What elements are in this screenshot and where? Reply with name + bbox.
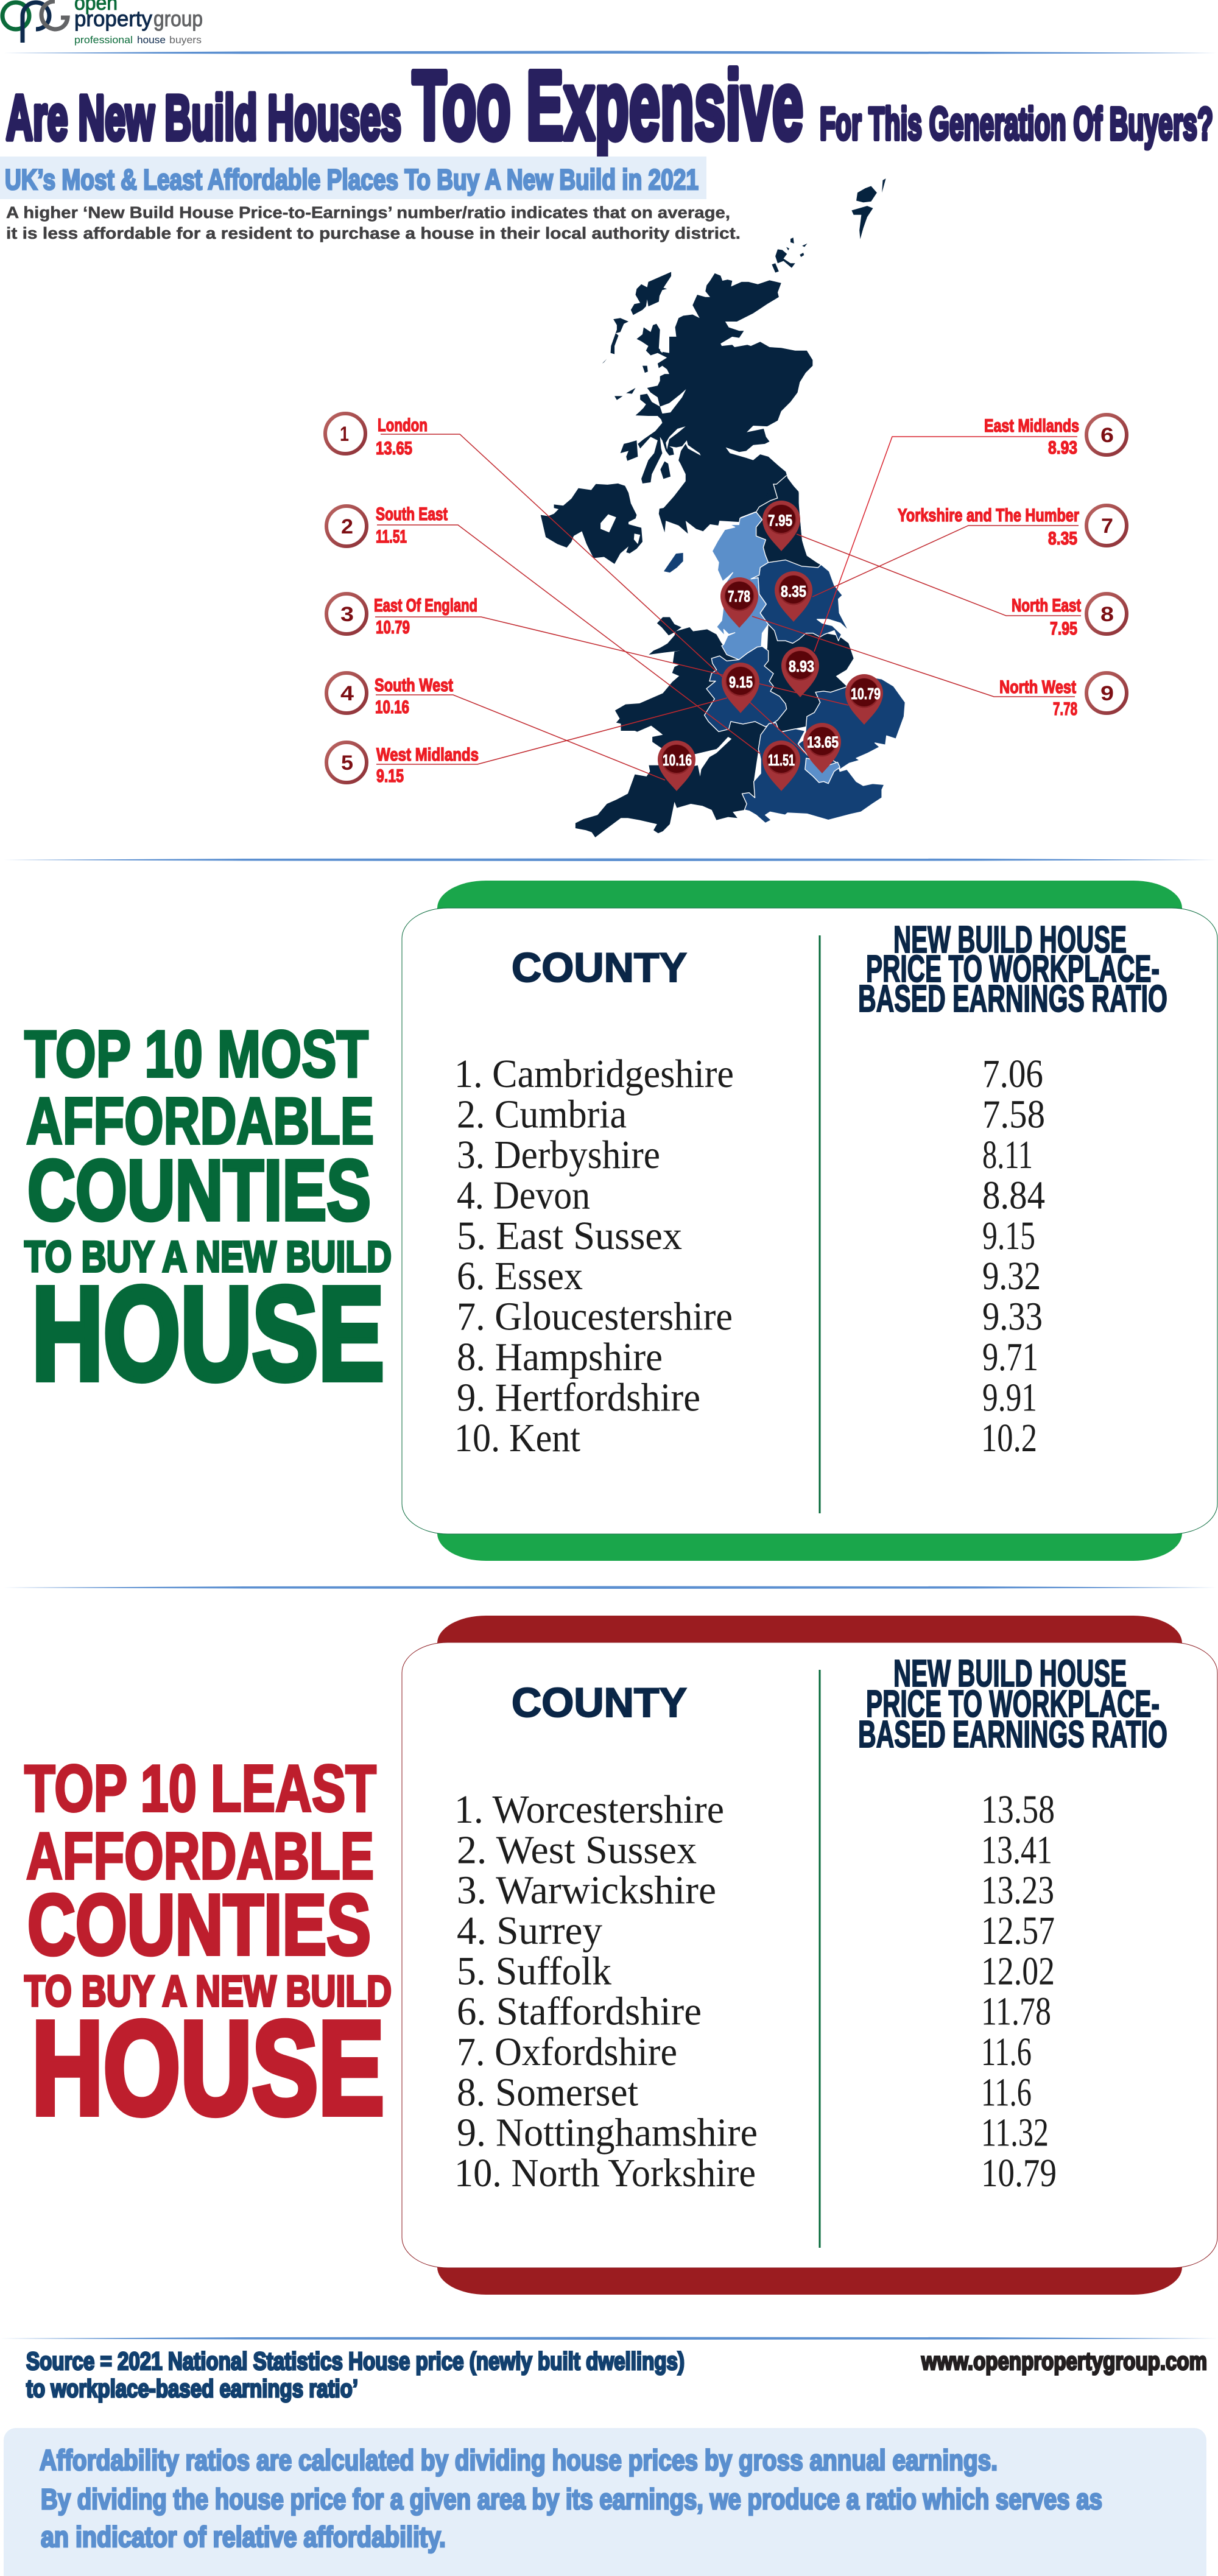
ratio values xyxy=(981,1787,1057,2195)
county list: 6. Essex xyxy=(457,1254,583,1298)
heading: top 10 least affordable counties: TO BUY A NEW BUILD xyxy=(24,1968,392,2016)
map pins xyxy=(658,501,883,791)
title: Are New Build Houses xyxy=(6,83,401,153)
subtitle band xyxy=(0,157,706,199)
county list xyxy=(454,1787,758,2195)
callout 2: South East: 11.51 xyxy=(376,527,407,547)
county list: 5. East Sussex xyxy=(457,1214,682,1258)
callout 6: East Midlands: 6 xyxy=(1100,424,1114,447)
explainer box xyxy=(4,2428,1206,2576)
callout 1: London: 13.65 xyxy=(376,438,412,459)
callout 3: East Of England: 3 xyxy=(340,603,354,626)
callout 4: South West: 4 xyxy=(340,682,354,705)
callout 4: South West: 10.16 xyxy=(375,697,409,717)
title: Too Expensive xyxy=(412,51,803,160)
map: Wales and South West xyxy=(576,617,784,837)
pin: South East: 11.51 xyxy=(768,751,795,769)
pin: South West xyxy=(658,741,695,791)
ratio values: 7.06 xyxy=(982,1052,1043,1096)
callout 6: East Midlands: 8.93 xyxy=(1048,438,1077,458)
callout 6: East Midlands xyxy=(984,415,1127,458)
county list: 9. Hertfordshire xyxy=(457,1376,700,1420)
callout 7: Yorkshire and The Humber: 8.35 xyxy=(1048,529,1077,549)
column heading: county: COUNTY xyxy=(512,945,687,991)
column heading: county: COUNTY xyxy=(512,1680,687,1726)
county list xyxy=(454,1052,734,1460)
ratio values: 11.78 xyxy=(981,1990,1051,2034)
callout 3: East Of England: 10.79 xyxy=(376,618,410,638)
map: North East and East Midlands xyxy=(751,476,854,731)
callout 5: West Midlands: 5 xyxy=(341,751,353,775)
heading: top 10 least affordable counties: TOP 10 LEAST xyxy=(24,1751,376,1826)
pin: East of England xyxy=(845,674,883,725)
callout 4: South West xyxy=(326,673,453,717)
callout 9: North West: North West xyxy=(999,677,1076,697)
callout 9: North West: 7.78 xyxy=(1053,699,1077,719)
ratio values: 9.15 xyxy=(982,1214,1035,1258)
ratio values: 8.84 xyxy=(982,1173,1045,1217)
callout 8: North East: 8 xyxy=(1100,603,1114,626)
callout 1: London: London xyxy=(378,415,428,435)
callout 6: East Midlands: East Midlands xyxy=(984,416,1079,436)
pin: West Midlands: 9.15 xyxy=(729,673,753,691)
pin: North West: 7.78 xyxy=(728,587,750,605)
subtitle band: UK’s Most & Least Affordable Places To Buy A New Build in 2021 xyxy=(5,163,699,195)
logo: open property group: professional xyxy=(74,34,133,46)
callout 3: East Of England: East Of England xyxy=(374,596,477,616)
title xyxy=(6,51,1213,160)
ratio values: 11.6 xyxy=(981,2030,1032,2074)
intro text: A higher ‘New Build House Price-to-Earnings’ number/ratio indicates that on average, xyxy=(6,203,730,222)
source note xyxy=(26,2347,685,2402)
county list: 6. Staffordshire xyxy=(457,1990,702,2034)
ratio values: 9.32 xyxy=(982,1254,1041,1298)
map: London region xyxy=(805,758,840,784)
callout 4: South West: South West xyxy=(375,675,453,695)
pin: South West: 10.16 xyxy=(663,751,692,769)
explainer box: Affordability ratios are calculated by dividing house prices by gross annual earnings. xyxy=(40,2444,998,2476)
callout 3: East Of England xyxy=(326,594,477,638)
county list: 9. Nottinghamshire xyxy=(457,2111,758,2155)
heading: top 10 most affordable counties: TOP 10 MOST xyxy=(24,1017,368,1091)
callout 1: London xyxy=(325,413,428,459)
pin: East of England: 10.79 xyxy=(851,684,881,703)
logo: open property group: house xyxy=(137,34,166,46)
panel: most affordable table xyxy=(402,881,1217,1561)
heading: top 10 most affordable counties: COUNTIES xyxy=(27,1142,371,1238)
heading: top 10 least affordable counties xyxy=(24,1751,392,2142)
ratio values: 13.58 xyxy=(981,1787,1055,1832)
county list: 7. Gloucestershire xyxy=(457,1295,733,1339)
ratio values: 12.02 xyxy=(981,1949,1055,1993)
county list: 7. Oxfordshire xyxy=(457,2030,677,2074)
map: Shetland xyxy=(851,178,886,239)
pin: West Midlands xyxy=(722,663,759,713)
callout 5: West Midlands: West Midlands xyxy=(376,745,479,765)
map: East of England region xyxy=(798,676,905,769)
ratio values: 7.58 xyxy=(982,1092,1045,1136)
ratio values: 13.23 xyxy=(981,1868,1054,1913)
county list: 10. Kent xyxy=(454,1416,580,1460)
map: South East region xyxy=(742,723,884,823)
explainer box: an indicator of relative affordability. xyxy=(41,2521,446,2553)
logo: open property group: buyers xyxy=(169,34,202,46)
intro text xyxy=(6,203,741,242)
callout 9: North West: 9 xyxy=(1100,682,1114,705)
source note: to workplace-based earnings ratio’ xyxy=(26,2374,358,2402)
ratio values: 9.33 xyxy=(982,1295,1043,1339)
callout 2: South East xyxy=(326,504,448,547)
callout 8: North East xyxy=(1012,594,1127,639)
map of the UK xyxy=(541,178,905,837)
county list: 10. North Yorkshire xyxy=(454,2151,756,2195)
heading: top 10 most affordable counties xyxy=(24,1017,392,1408)
intro text: it is less affordable for a resident to purchase a house in their local authority district. xyxy=(6,224,741,242)
pin: Yorkshire and The Humber xyxy=(775,571,812,622)
column heading: ratio xyxy=(858,919,1167,1020)
ratio values: 9.91 xyxy=(982,1376,1037,1420)
ratio values: 11.32 xyxy=(981,2111,1049,2155)
leader lines xyxy=(375,434,1081,780)
column heading: ratio xyxy=(858,1653,1167,1756)
callout 8: North East: North East xyxy=(1012,596,1081,616)
ratio values: 8.11 xyxy=(982,1133,1033,1177)
county list: 4. Devon xyxy=(457,1173,590,1217)
county list: 5. Suffolk xyxy=(457,1949,611,1993)
map: Scotland and islands xyxy=(602,238,820,568)
callout 5: West Midlands: 9.15 xyxy=(376,766,404,786)
map: Northern Ireland xyxy=(541,484,642,564)
county list: 8. Somerset xyxy=(457,2070,638,2114)
county list: 2. Cumbria xyxy=(457,1092,627,1136)
heading: top 10 most affordable counties: HOUSE xyxy=(32,1260,384,1408)
map: West Midlands region xyxy=(705,646,787,731)
ratio values: 13.41 xyxy=(981,1828,1052,1872)
callout 2: South East: 2 xyxy=(341,515,353,538)
county list: 8. Hampshire xyxy=(457,1335,663,1379)
callout 5: West Midlands xyxy=(326,742,479,786)
county list: 1. Cambridgeshire xyxy=(454,1052,734,1096)
ratio values: 10.79 xyxy=(981,2151,1057,2195)
ratio values: 11.6 xyxy=(981,2070,1032,2114)
county list: 1. Worcestershire xyxy=(454,1787,724,1832)
map: Isle of Man xyxy=(664,553,683,572)
county list: 2. West Sussex xyxy=(457,1828,697,1872)
ratio values: 12.57 xyxy=(981,1909,1055,1953)
pin: London xyxy=(803,723,841,773)
pin: Yorkshire and The Humber: 8.35 xyxy=(781,582,806,600)
callout 1: London: 1 xyxy=(340,423,349,446)
callout 7: Yorkshire and The Humber: Yorkshire and The Humber xyxy=(898,505,1079,526)
callout 2: South East: South East xyxy=(376,504,448,524)
heading: top 10 least affordable counties: COUNTIES xyxy=(27,1876,371,1972)
logo: open property group xyxy=(2,0,203,46)
county list: 4. Surrey xyxy=(457,1909,602,1953)
pin: South East xyxy=(762,741,800,791)
county list: 3. Warwickshire xyxy=(457,1868,716,1913)
logo: open property group: group xyxy=(153,6,203,31)
ratio values: 10.2 xyxy=(981,1416,1037,1460)
ratio values xyxy=(981,1052,1045,1460)
heading: top 10 least affordable counties: HOUSE xyxy=(32,1994,384,2142)
pin: North East xyxy=(762,501,800,551)
county list: 3. Derbyshire xyxy=(457,1133,660,1177)
callout 7: Yorkshire and The Humber: 7 xyxy=(1101,515,1113,538)
pin: East Midlands xyxy=(781,647,819,697)
map: Yorkshire and The Humber region xyxy=(751,560,848,643)
pin: London: 13.65 xyxy=(807,733,839,751)
pin: North East: 7.95 xyxy=(768,512,792,530)
callout 9: North West xyxy=(999,673,1127,719)
heading: top 10 most affordable counties: TO BUY A NEW BUILD xyxy=(24,1233,392,1281)
ratio values: 9.71 xyxy=(982,1335,1038,1379)
source note: Source = 2021 National Statistics House price (newly built dwellings) xyxy=(26,2347,685,2375)
heading: top 10 most affordable counties: AFFORDABLE xyxy=(26,1084,374,1158)
callout 7: Yorkshire and The Humber xyxy=(898,505,1127,549)
panel: least affordable table xyxy=(402,1616,1217,2295)
callout 8: North East: 7.95 xyxy=(1050,619,1077,639)
heading: top 10 least affordable counties: AFFORDABLE xyxy=(26,1819,374,1893)
map: North West region xyxy=(712,512,769,660)
pin: North West xyxy=(720,577,758,628)
pin: East Midlands: 8.93 xyxy=(789,657,814,675)
logo: open property group: property xyxy=(74,6,152,31)
